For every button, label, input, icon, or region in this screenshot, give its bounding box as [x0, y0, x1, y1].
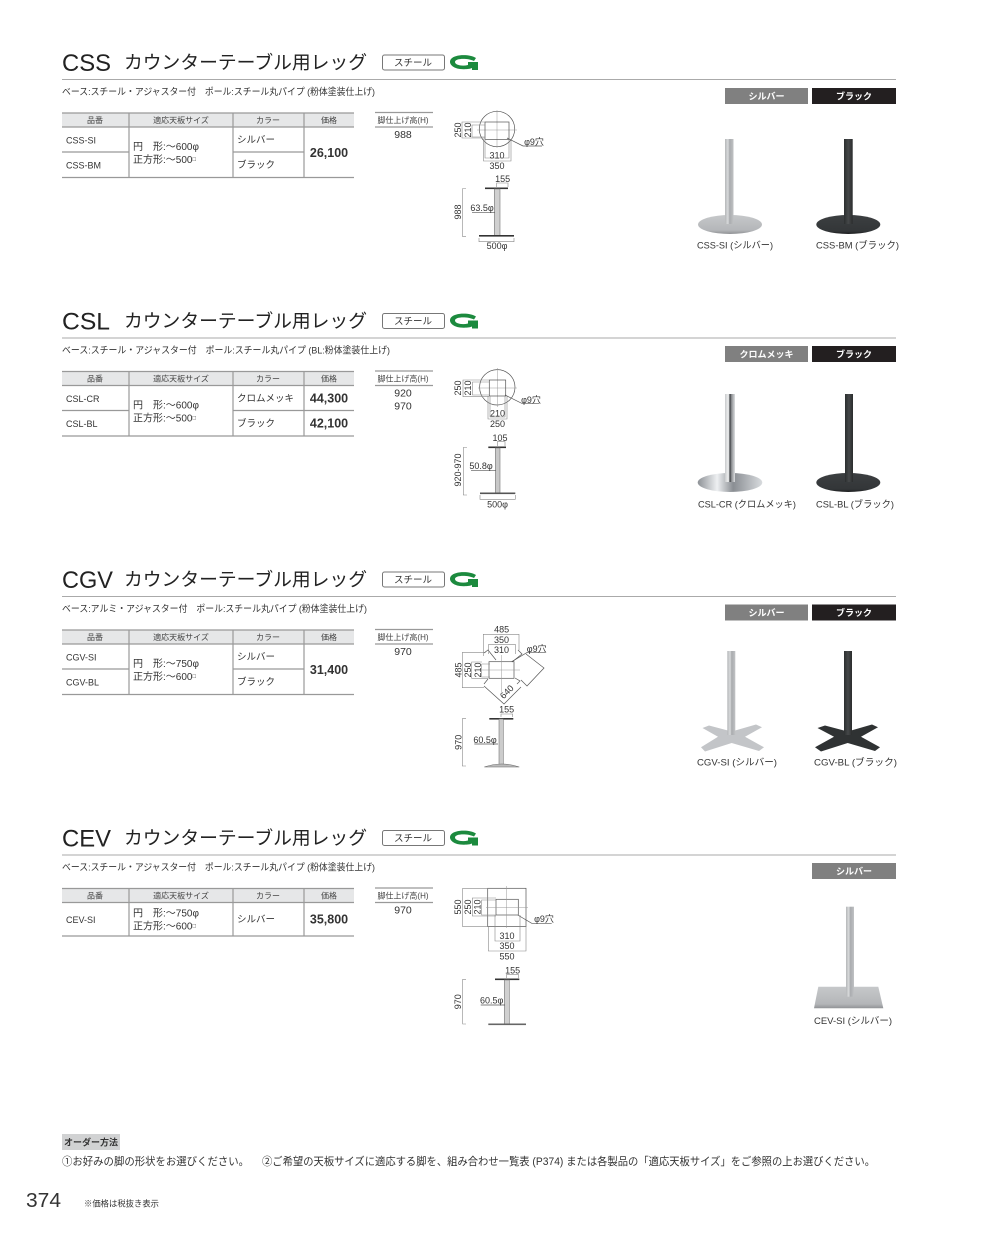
spec table: シルバー: [237, 135, 275, 146]
spec table: 正方形:～600: [133, 672, 192, 683]
heading: CSS: スチール: [394, 58, 432, 69]
diagram: CEV plan and elevation: 210: [472, 899, 482, 915]
height table: [375, 630, 433, 658]
diagram: CEV plan and elevation: 550: [453, 899, 463, 915]
diagram: CSL plan and elevation: φ9穴: [521, 395, 541, 405]
spec table: カラー: [256, 633, 280, 642]
heading: CSS: カウンターテーブル用レッグ: [124, 52, 367, 73]
spec table: 価格: [321, 632, 337, 642]
diagram: CEV plan and elevation: 60.5φ: [480, 996, 504, 1006]
footnote: ※価格は税抜き表示: [84, 1198, 159, 1208]
diagram: CSL plan and elevation: 50.8φ: [469, 461, 493, 471]
heading: CGV: カウンターテーブル用レッグ: [124, 569, 367, 590]
diagram: CSL plan and elevation: [453, 368, 541, 510]
diagram: CGV plan and elevation: 155: [499, 704, 514, 714]
spec table: 品番: [87, 374, 103, 384]
heading: CEV: スチール: [394, 834, 432, 844]
diagram: CGV plan and elevation: 350: [494, 635, 509, 645]
spec table: 円 形:～600φ: [133, 400, 199, 412]
swatch: black: [812, 346, 896, 362]
diagram: CSS plan and elevation: 210: [463, 122, 473, 138]
diagram: CGV plan and elevation: 250: [463, 662, 473, 678]
heading: CGV: スチール: [394, 575, 432, 586]
heading: CGV: CGV: [62, 567, 114, 594]
diagram: CSS plan and elevation: [453, 110, 544, 251]
swatch: silver: [725, 604, 808, 620]
diagram: CEV plan and elevation: 310: [499, 931, 515, 941]
diagram: CSL plan and elevation: 250: [453, 380, 463, 396]
spec table: 円 形:～750φ: [133, 908, 199, 920]
diagram: CSS plan and elevation: 155: [495, 174, 510, 184]
heading: CEV: CEV: [62, 826, 112, 852]
order method note: ②ご希望の天板サイズに適応する脚を、組み合わせ一覧表 (P374) または各製品の「適応天板サイズ」をご参照の上お選びください。: [262, 1154, 875, 1168]
diagram: CGV plan and elevation: 60.5φ: [473, 735, 497, 745]
height table: 脚仕上げ高(H): [377, 115, 429, 125]
diagram: CEV plan and elevation: 250: [463, 899, 473, 915]
spec table: 円 形:～750φ: [133, 658, 199, 670]
spec table: 適応天板サイズ: [153, 374, 209, 384]
section: CSS: [62, 50, 899, 252]
heading: CEV: カウンターテーブル用レッグ: [124, 828, 367, 848]
swatch: silver: [725, 88, 808, 104]
diagram: CEV plan and elevation: [453, 886, 554, 1025]
height table: 970: [394, 646, 412, 658]
spec text: ベース:スチール・アジャスター付 ポール:スチール丸パイプ (粉体塗装仕上げ): [62, 86, 375, 98]
diagram: CGV plan and elevation: 970: [454, 735, 464, 750]
diagram: CSS plan and elevation: φ9穴: [524, 137, 544, 147]
heading: CSS: [62, 50, 896, 80]
section: CSL: [62, 308, 896, 510]
spec table: 価格: [321, 890, 337, 900]
diagram: CEV plan and elevation: φ9穴: [534, 914, 554, 924]
spec table: ブラック: [237, 159, 275, 171]
swatch: black: [812, 88, 896, 104]
order method note: ①お好みの脚の形状をお選びください。: [62, 1154, 249, 1168]
photo: CSL-BL: CSL-BL (ブラック): [816, 498, 894, 510]
spec table: CSS-SI: [66, 136, 96, 146]
photo: CSL-BL: [816, 394, 894, 510]
order method note: オーダー方法: [64, 1136, 118, 1148]
spec table: カラー: [256, 892, 280, 900]
heading: CGV: [62, 567, 896, 596]
photo: CGV-SI: [697, 651, 777, 768]
spec table: □: [192, 416, 196, 422]
photo: CEV-SI: [814, 907, 892, 1027]
spec table: 正方形:～500: [133, 155, 192, 166]
heading: CSL: スチール: [394, 316, 432, 328]
swatch: black: ブラック: [836, 607, 872, 618]
heading: CSL: CSL: [62, 308, 110, 336]
spec table: □: [192, 157, 196, 163]
spec table: クロムメッキ: [237, 394, 294, 404]
heading: CSL: [62, 308, 896, 338]
spec table: 42,100: [310, 416, 348, 430]
spec table: 適応天板サイズ: [153, 632, 209, 642]
height table: 脚仕上げ高(H): [377, 632, 429, 642]
section: CGV: [62, 567, 897, 768]
spec table: [62, 113, 354, 178]
heading: CSS: CSS: [62, 50, 111, 77]
heading: CEV: [62, 826, 896, 855]
spec table: [62, 888, 354, 936]
diagram: CSL plan and elevation: 500φ: [487, 500, 508, 510]
spec table: カラー: [256, 374, 280, 384]
spec text: ベース:スチール・アジャスター付 ポール:スチール丸パイプ (粉体塗装仕上げ): [62, 862, 375, 874]
height table: 970: [394, 904, 412, 916]
spec table: CGV-SI: [66, 652, 97, 662]
diagram: CEV plan and elevation: 970: [453, 994, 463, 1009]
spec table: CGV-BL: [66, 678, 99, 688]
spec table: ブラック: [237, 418, 275, 430]
swatch: silver: [812, 863, 896, 879]
photo: CEV-SI: CEV-SI (シルバー): [814, 1016, 892, 1027]
heading: CSL: カウンターテーブル用レッグ: [124, 310, 367, 332]
order method note: [62, 1134, 875, 1168]
spec table: 35,800: [310, 912, 348, 926]
spec table: 31,400: [310, 663, 348, 677]
spec table: [62, 630, 354, 694]
diagram: CGV plan and elevation: 485: [494, 624, 509, 634]
spec table: □: [192, 924, 196, 930]
spec table: 品番: [87, 115, 103, 125]
spec table: [62, 372, 354, 436]
swatch: chrome: クロムメッキ: [739, 350, 794, 360]
height table: 920: [394, 388, 412, 400]
spec table: ブラック: [237, 676, 275, 688]
height table: 970: [394, 400, 412, 412]
diagram: CSL plan and elevation: 210: [490, 408, 505, 418]
height table: 脚仕上げ高(H): [377, 890, 429, 900]
photo: CGV-BL: [814, 651, 897, 768]
spec table: 品番: [87, 632, 103, 642]
spec table: 円 形:～600φ: [133, 141, 199, 153]
spec text: ベース:スチール・アジャスター付 ポール:スチール丸パイプ (BL:粉体塗装仕上げ): [62, 344, 390, 356]
spec table: カラー: [256, 116, 280, 125]
swatch: black: ブラック: [836, 90, 872, 102]
diagram: CSS plan and elevation: 63.5φ: [470, 203, 494, 213]
photo: CSS-SI: [697, 139, 773, 252]
photo: CGV-SI: CGV-SI (シルバー): [697, 758, 777, 768]
diagram: CSS plan and elevation: 988: [453, 204, 463, 220]
height table: 988: [394, 129, 412, 141]
diagram: CEV plan and elevation: 350: [499, 941, 515, 951]
spec table: CSL-CR: [66, 394, 100, 404]
spec table: 品番: [87, 890, 103, 900]
spec table: 26,100: [310, 146, 348, 160]
spec table: 44,300: [310, 392, 348, 406]
section: CEV: [62, 826, 896, 1027]
diagram: CGV plan and elevation: 640: [498, 683, 516, 701]
photo: CSL-CR: [698, 394, 796, 510]
photo: CSS-BM: [816, 139, 899, 252]
diagram: CSL plan and elevation: 210: [463, 380, 473, 396]
diagram: CGV plan and elevation: 485: [454, 662, 464, 678]
diagram: CSL plan and elevation: 250: [490, 419, 505, 429]
height table: [375, 371, 433, 412]
spec table: 適応天板サイズ: [153, 115, 209, 125]
swatch: silver: シルバー: [748, 92, 785, 102]
spec table: 価格: [321, 115, 337, 125]
diagram: CEV plan and elevation: 155: [505, 966, 520, 976]
diagram: CSL plan and elevation: 105: [492, 433, 508, 443]
diagram: CSS plan and elevation: 350: [489, 161, 505, 171]
photo: CSS-BM: CSS-BM (ブラック): [816, 240, 899, 252]
spec table: 価格: [321, 374, 337, 384]
diagram: CGV plan and elevation: 310: [494, 645, 509, 655]
height table: [375, 112, 433, 141]
swatch: chrome: [725, 346, 808, 362]
swatch: black: [812, 604, 896, 620]
spec table: 適応天板サイズ: [153, 890, 209, 900]
spec table: CSS-BM: [66, 160, 101, 170]
photo: CGV-BL: CGV-BL (ブラック): [814, 756, 897, 768]
spec table: CEV-SI: [66, 915, 96, 925]
diagram: CEV plan and elevation: 550: [499, 952, 515, 962]
diagram: CGV plan and elevation: 210: [473, 662, 483, 678]
spec table: CSL-BL: [66, 419, 98, 429]
spec table: シルバー: [237, 652, 275, 663]
spec table: 正方形:～600: [133, 922, 192, 932]
height table: 脚仕上げ高(H): [377, 374, 429, 384]
diagram: CGV plan and elevation: [454, 624, 547, 767]
photo: CSS-SI: CSS-SI (シルバー): [697, 240, 773, 252]
spec table: シルバー: [237, 914, 275, 926]
spec table: □: [192, 674, 196, 680]
swatch: black: ブラック: [836, 348, 872, 360]
diagram: CSL plan and elevation: 920-970: [453, 453, 463, 487]
photo: CSL-CR: CSL-CR (クロムメッキ): [698, 500, 796, 510]
swatch: silver: シルバー: [836, 866, 872, 876]
spec text: ベース:アルミ・アジャスター付 ポール:スチール丸パイプ (粉体塗装仕上げ): [62, 603, 367, 615]
diagram: CGV plan and elevation: φ9穴: [527, 644, 547, 654]
diagram: CSS plan and elevation: 250: [453, 122, 463, 138]
height table: [375, 888, 433, 916]
page number: 374: [26, 1190, 61, 1212]
swatch: silver: シルバー: [748, 608, 785, 618]
diagram: CSS plan and elevation: 500φ: [487, 241, 508, 251]
spec table: 正方形:～500: [133, 414, 192, 424]
diagram: CSS plan and elevation: 310: [489, 150, 505, 160]
